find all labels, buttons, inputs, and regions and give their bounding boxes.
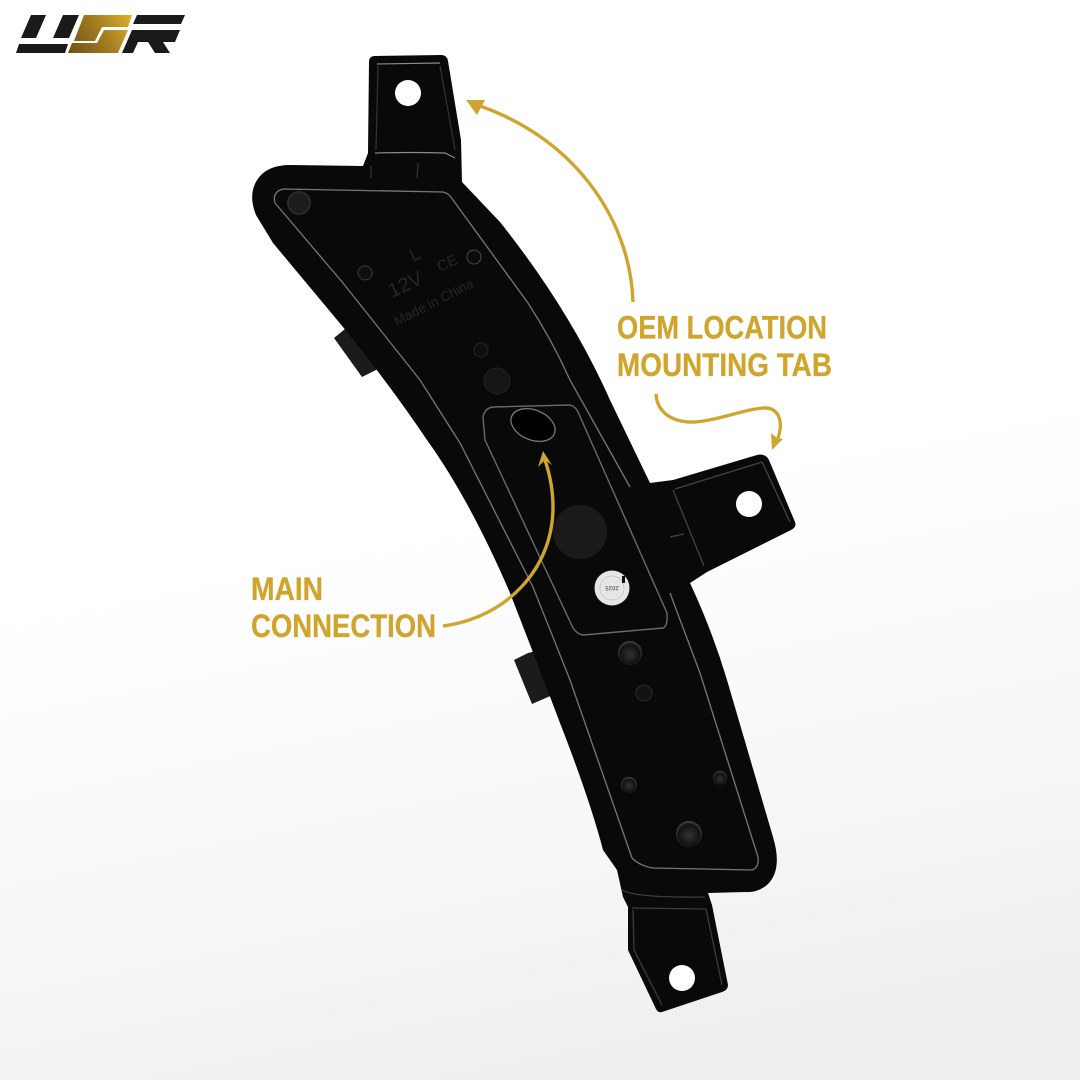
label: main connection — [251, 571, 436, 644]
mounting hole top — [395, 80, 421, 106]
date sticker — [594, 570, 630, 606]
embossed markings: CE — [435, 251, 461, 276]
molded bosses — [288, 192, 727, 847]
arrow: to right mounting tab — [656, 394, 783, 450]
bracket body — [252, 55, 796, 1012]
side clip lower — [514, 650, 560, 704]
label: OEM location mounting tab — [617, 310, 832, 383]
embossed markings: Made in China — [392, 276, 476, 329]
logo: USR — [16, 15, 185, 53]
label: OEM location mounting tab: OEM LOCATION — [617, 310, 827, 346]
mounting hole right — [736, 491, 762, 517]
main connector port — [506, 402, 560, 448]
mounting hole bottom — [669, 965, 695, 991]
date sticker: 2025 — [605, 584, 619, 590]
label: main connection: MAIN — [251, 571, 323, 607]
plate outline rib — [274, 189, 758, 870]
round vent membrane — [553, 505, 607, 559]
arrow: to top mounting tab — [466, 100, 633, 302]
embossed markings: L — [406, 243, 424, 266]
arrow: to main connector — [443, 451, 553, 626]
bottom tab highlights — [622, 890, 722, 1005]
product: black mounting bracket — [252, 55, 796, 1012]
connector plate outline — [483, 405, 667, 635]
right tab highlights — [670, 462, 790, 566]
embossed markings: 12V — [385, 267, 427, 303]
label: main connection: CONNECTION — [251, 608, 436, 644]
side clip upper — [334, 329, 380, 377]
label: OEM location mounting tab: MOUNTING TAB — [617, 347, 832, 383]
top tab highlights — [375, 63, 455, 158]
embossed markings — [385, 243, 476, 329]
